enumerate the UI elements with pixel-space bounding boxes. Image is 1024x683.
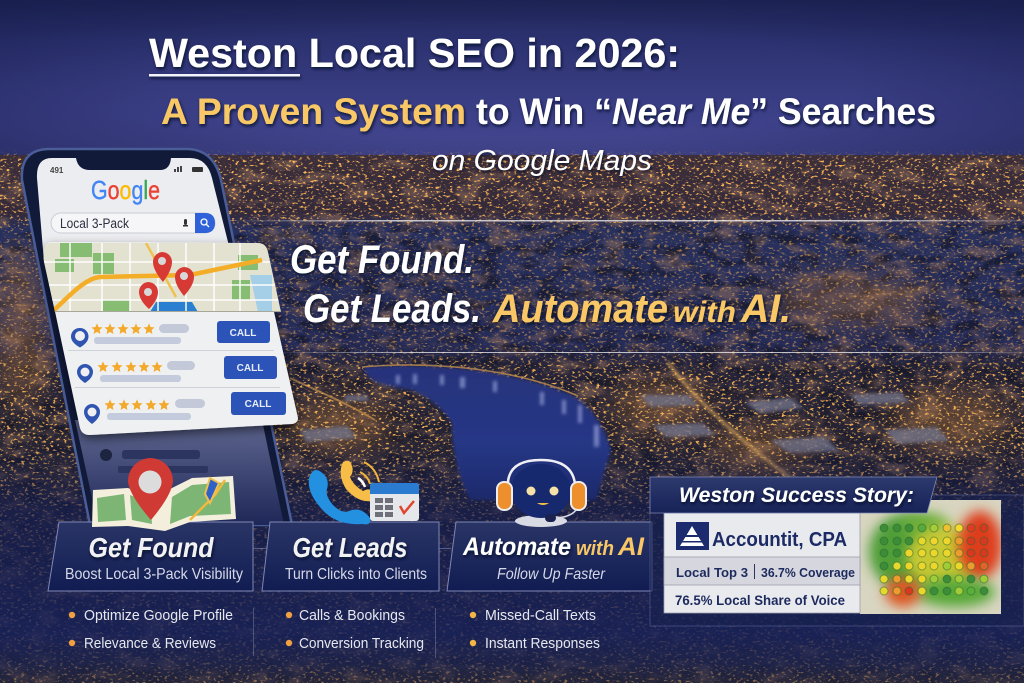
lower phone bars	[100, 449, 208, 473]
title: Weston Local SEO in 2026:	[149, 30, 680, 76]
bullets: automate: Missed-Call Texts	[485, 607, 596, 624]
icon: map with pin	[92, 458, 236, 531]
pillar connector rules	[253, 548, 451, 549]
panel: automate with ai: Automate	[462, 533, 571, 561]
bullets: automate	[470, 607, 600, 652]
client logo	[676, 522, 709, 550]
client card: 36.7% Coverage	[761, 565, 855, 580]
phone status bar: 491	[50, 166, 64, 175]
bullets: get leads: Calls & Bookings	[299, 607, 405, 624]
title	[149, 30, 936, 177]
search bar	[51, 213, 215, 233]
bullets: get leads: Conversion Tracking	[299, 635, 424, 652]
panel: automate with ai: Follow Up Faster	[497, 566, 606, 583]
google logo: Google	[91, 175, 160, 205]
map pins	[139, 252, 194, 309]
headline: Get Leads.	[303, 287, 481, 331]
panel: get leads	[262, 522, 439, 591]
bullets: automate: Instant Responses	[485, 635, 600, 652]
phone mockup	[22, 149, 292, 525]
headline: AI.	[740, 287, 791, 331]
panel: automate with ai: AI	[617, 533, 645, 561]
icon: ai robot headset	[497, 460, 586, 527]
listing 1	[68, 321, 274, 351]
title: A Proven System	[161, 91, 466, 132]
ribbon heading	[650, 477, 937, 513]
listing 2	[75, 356, 280, 388]
listing 3: CALL	[245, 399, 271, 410]
ribbon heading: Weston Success Story:	[679, 484, 914, 507]
bullets: get found: Optimize Google Profile	[84, 607, 233, 624]
panel: automate with ai: with	[576, 538, 614, 560]
local 3-pack card	[40, 240, 298, 435]
listing 2: CALL	[237, 363, 263, 374]
bullets: get leads	[286, 607, 424, 652]
title: to Win “Near Me” Searches	[476, 91, 936, 132]
headline: with	[673, 296, 736, 329]
panel: get found: Get Found	[88, 532, 214, 563]
title: on Google Maps	[432, 145, 652, 177]
client card: 76.5% Local Share of Voice	[675, 593, 845, 608]
listing 3	[84, 392, 286, 424]
panel: get leads: Get Leads	[292, 532, 408, 563]
panel: weston success story	[650, 477, 1024, 626]
headline	[290, 238, 791, 331]
client card: Local Top 3	[676, 565, 748, 580]
headline: Automate	[492, 287, 668, 331]
client card: Accountit, CPA	[712, 529, 847, 551]
listing 1: CALL	[230, 328, 256, 339]
panel: get found	[48, 522, 253, 591]
bullets: get found	[69, 607, 233, 652]
heatmap	[860, 500, 1002, 614]
panel: get leads: Turn Clicks into Clients	[285, 566, 427, 583]
icon: phones and calendar	[309, 461, 419, 524]
panel: get found: Boost Local 3-Pack Visibility	[65, 566, 243, 583]
bullets: get found: Relevance & Reviews	[84, 635, 216, 652]
divider lines	[230, 220, 1024, 353]
map	[44, 243, 281, 312]
headline: Get Found.	[290, 238, 474, 282]
panel: automate with ai	[447, 522, 652, 591]
client card	[664, 513, 860, 613]
search bar: Local 3-Pack	[60, 216, 129, 231]
phone status bar	[50, 166, 203, 175]
